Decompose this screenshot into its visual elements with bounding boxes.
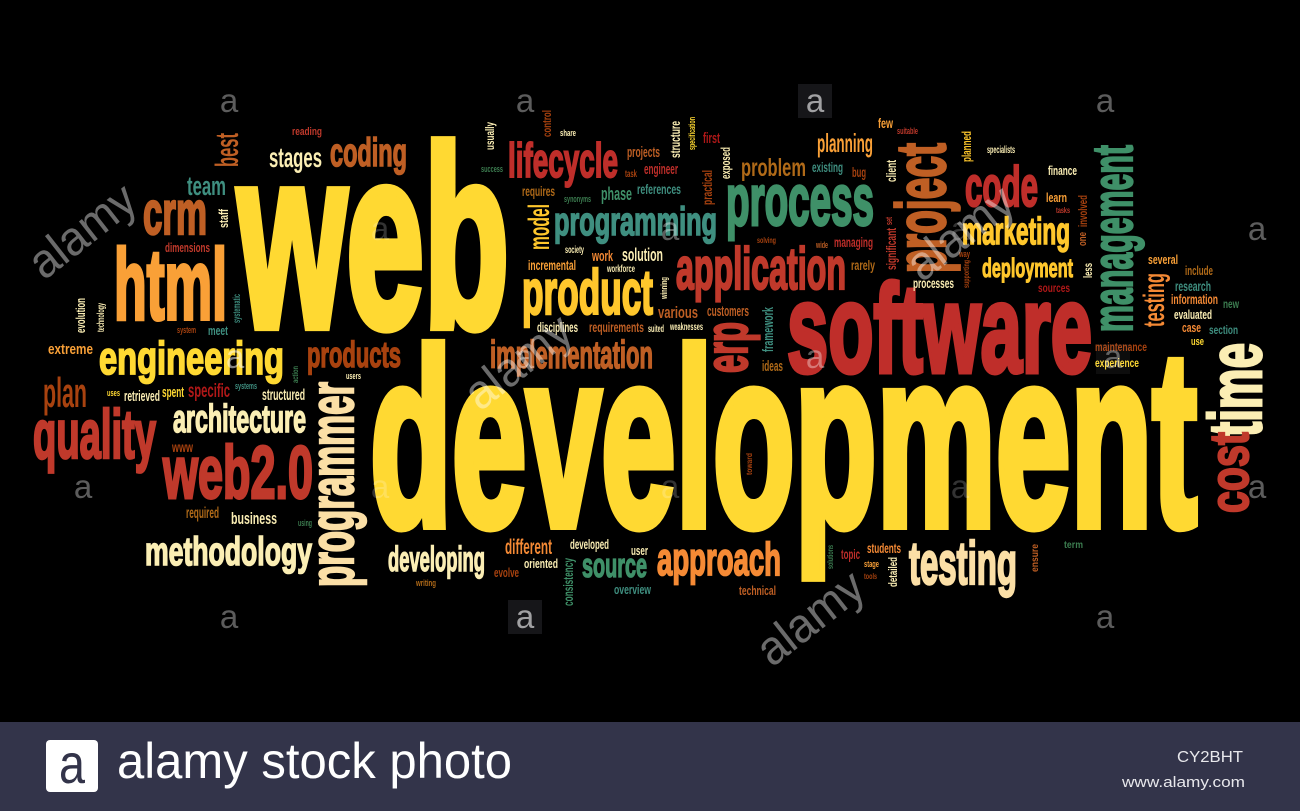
small words: bottom cluster: oriented bbox=[524, 556, 558, 571]
small words: bottom cluster: topic bbox=[841, 546, 860, 562]
small words: left cluster: technology bbox=[96, 303, 107, 332]
small words: centre cluster: incremental bbox=[528, 257, 576, 273]
watermark letter tiles bbox=[508, 84, 1130, 634]
small words: bottom cluster: term bbox=[1064, 540, 1083, 551]
footer brand text: alamy stock photo bbox=[117, 733, 512, 789]
small words: centre cluster: task bbox=[625, 169, 637, 180]
word: engineering: engineering bbox=[99, 332, 284, 384]
small words: left cluster: reading bbox=[292, 126, 322, 138]
small words: upper right cluster: new bbox=[1223, 297, 1239, 311]
small words: upper right cluster: problem bbox=[741, 154, 806, 182]
small words: left cluster: plan bbox=[43, 369, 87, 416]
watermark: alamy diagonals bbox=[18, 173, 1025, 677]
small words: upper right cluster: research bbox=[1175, 278, 1211, 294]
watermark letters a: a bbox=[516, 82, 535, 119]
small words: upper right cluster: learn bbox=[1046, 190, 1067, 205]
small words: upper right cluster: existing bbox=[812, 159, 843, 175]
word: source: source bbox=[582, 547, 647, 585]
small words: upper right cluster: significant bbox=[883, 228, 899, 270]
word: testing: testing bbox=[909, 530, 1017, 597]
word: html: html bbox=[114, 229, 227, 341]
small words: upper right cluster: way bbox=[958, 249, 970, 259]
watermark letters a: a bbox=[226, 338, 245, 375]
watermark letters a: a bbox=[661, 210, 680, 247]
word: quality: quality bbox=[33, 396, 156, 473]
small words: centre cluster: practical bbox=[699, 170, 715, 205]
image id: CY2BHT bbox=[1177, 749, 1243, 766]
small words: upper right cluster: bug bbox=[852, 164, 866, 180]
watermark overlay bbox=[18, 82, 1267, 677]
small words: centre cluster: work bbox=[591, 248, 613, 265]
small words: upper right cluster: information bbox=[1171, 291, 1218, 307]
small words: upper right cluster: evaluated bbox=[1174, 307, 1212, 322]
word: web2.0: web2.0 bbox=[162, 431, 313, 514]
word: approach: approach bbox=[657, 533, 781, 585]
small words: upper right cluster: rarely bbox=[851, 257, 875, 273]
word: programming: programming bbox=[554, 200, 717, 244]
small words: centre cluster: success bbox=[481, 164, 503, 174]
small words: centre cluster: specification bbox=[687, 117, 697, 150]
word: crm: crm bbox=[143, 179, 207, 247]
watermark: alamy diagonals: alamy bbox=[454, 304, 583, 421]
small words: upper right cluster: use bbox=[1191, 336, 1204, 348]
small words: left cluster: stages bbox=[269, 142, 322, 173]
small words: upper right cluster: involved bbox=[1076, 195, 1090, 227]
small words: bottom cluster: different bbox=[505, 536, 552, 559]
small words: centre cluster bbox=[481, 110, 783, 375]
small words: left cluster: uses bbox=[107, 388, 120, 398]
watermark letters a: a bbox=[516, 338, 535, 375]
small words: centre cluster: solution bbox=[622, 245, 663, 265]
word: process: process bbox=[726, 161, 874, 241]
small words: bottom cluster: toward bbox=[745, 453, 754, 475]
small words: centre cluster: various bbox=[658, 303, 698, 322]
small words: left cluster: staff bbox=[216, 209, 231, 228]
website: www.alamy.com bbox=[1121, 774, 1245, 791]
word: project: project bbox=[882, 143, 960, 273]
small words: upper right cluster: few bbox=[878, 115, 893, 131]
word: time: time bbox=[1194, 343, 1277, 437]
small words: left cluster: dimensions bbox=[165, 240, 210, 255]
small words: centre cluster: suited bbox=[648, 324, 664, 335]
small words: centre cluster: structure bbox=[667, 121, 683, 158]
small words: upper right cluster: specialists bbox=[987, 145, 1015, 156]
word: methodology: methodology bbox=[145, 530, 313, 574]
small words: bottom cluster: detailed bbox=[886, 557, 900, 587]
watermark letters a: a bbox=[1248, 210, 1267, 247]
small words: left cluster: system bbox=[177, 325, 196, 335]
small words: centre cluster: winning bbox=[659, 277, 669, 300]
small words: centre cluster: workforce bbox=[606, 264, 635, 275]
word: software: software bbox=[787, 260, 1092, 399]
watermark letters a bbox=[74, 82, 1267, 635]
small words: centre cluster: usually bbox=[483, 122, 497, 150]
small words: centre cluster: disciplines bbox=[537, 319, 578, 335]
small words: left cluster: www bbox=[171, 439, 193, 455]
small words: upper right cluster: include bbox=[1185, 263, 1213, 278]
watermark letters a: a bbox=[806, 338, 825, 375]
word: lifecycle: lifecycle bbox=[508, 135, 618, 188]
word: code: code bbox=[965, 155, 1038, 219]
small words: left cluster: team bbox=[187, 171, 226, 201]
small words: upper right cluster: supporting bbox=[962, 260, 971, 288]
small words: bottom cluster: writing bbox=[415, 578, 436, 588]
small words: bottom cluster bbox=[415, 453, 1083, 606]
watermark letters a: a bbox=[806, 82, 825, 119]
watermark: alamy diagonals: alamy bbox=[18, 173, 147, 290]
watermark letters a: a bbox=[1096, 598, 1115, 635]
small words: centre cluster: ideas bbox=[762, 358, 783, 375]
small words: centre cluster: control bbox=[540, 110, 554, 137]
watermark letters a: a bbox=[220, 82, 239, 119]
small words: left cluster: meet bbox=[208, 323, 228, 338]
watermark letters a: a bbox=[1096, 82, 1115, 119]
word: implementation: implementation bbox=[490, 334, 653, 377]
watermark letters a: a bbox=[371, 210, 390, 247]
small words: centre cluster: society bbox=[565, 245, 584, 256]
small words: bottom cluster: technical bbox=[739, 583, 776, 598]
small words: left cluster: systematic bbox=[232, 294, 243, 323]
word: application: application bbox=[676, 236, 846, 302]
icon: alamy logo: a bbox=[59, 732, 86, 795]
word: coding: coding bbox=[330, 131, 407, 175]
word: web: web bbox=[237, 96, 509, 381]
icon: alamy logo bbox=[46, 732, 98, 795]
watermark letters a: a bbox=[1104, 338, 1123, 375]
small words: left cluster: retrieved bbox=[124, 388, 160, 405]
small words: left cluster: action bbox=[291, 366, 300, 383]
small words: upper right cluster bbox=[741, 115, 1239, 370]
small words: left cluster: structured bbox=[262, 387, 305, 404]
small words: left cluster: systems bbox=[235, 381, 257, 391]
word: testing (vertical): testing bbox=[1138, 273, 1171, 327]
small words: bottom cluster: students bbox=[867, 540, 901, 556]
word: architecture: architecture bbox=[173, 398, 306, 441]
word: marketing: marketing bbox=[962, 211, 1070, 253]
small words: centre cluster: phase bbox=[601, 184, 632, 204]
small words: upper right cluster: client bbox=[883, 160, 899, 182]
small words: centre cluster: framework bbox=[760, 307, 777, 352]
small words: upper right cluster: sources bbox=[1038, 281, 1070, 295]
small words: bottom cluster: overview bbox=[614, 582, 652, 597]
small words: upper right cluster: set bbox=[884, 217, 894, 225]
small words: centre cluster: share bbox=[560, 128, 576, 138]
small words: upper right cluster: less bbox=[1081, 263, 1095, 278]
watermark letters a: a bbox=[661, 468, 680, 505]
small words: centre cluster: engineer bbox=[644, 161, 678, 178]
small words: centre cluster: weaknesses bbox=[669, 322, 703, 333]
small words: upper right cluster: wide bbox=[815, 240, 828, 250]
word: deployment: deployment bbox=[982, 253, 1073, 283]
small words: centre cluster: requires bbox=[522, 183, 555, 199]
small words: left cluster: users bbox=[346, 371, 361, 381]
small words: left cluster: spent bbox=[162, 384, 184, 401]
small words: upper right cluster: one bbox=[1077, 232, 1089, 246]
small words: bottom cluster: stage bbox=[864, 559, 879, 569]
small words: upper right cluster: case bbox=[1182, 320, 1201, 335]
small words: left cluster: using bbox=[298, 518, 312, 528]
small words: bottom cluster: user bbox=[631, 543, 648, 558]
small words: upper right cluster: tasks bbox=[1056, 206, 1070, 215]
small words: upper right cluster: section bbox=[1209, 323, 1238, 337]
small words: upper right cluster: maintenance bbox=[1095, 340, 1147, 354]
watermark letters a: a bbox=[220, 598, 239, 635]
small words: upper right cluster: solving bbox=[757, 236, 776, 245]
word: products: products bbox=[307, 334, 401, 375]
watermark: alamy diagonals: alamy bbox=[746, 560, 875, 677]
small words: upper right cluster: several bbox=[1148, 252, 1178, 267]
small words: left cluster: required bbox=[186, 505, 219, 522]
small words: left cluster: business bbox=[231, 509, 277, 528]
word: erp: erp bbox=[693, 322, 760, 373]
small words: left cluster: best bbox=[209, 133, 245, 167]
small words: upper right cluster: suitable bbox=[897, 126, 918, 136]
watermark letters a: a bbox=[951, 468, 970, 505]
small words: bottom cluster: ensure bbox=[1030, 544, 1041, 572]
small words: left cluster: extreme bbox=[48, 341, 93, 358]
footer band bbox=[0, 722, 1300, 811]
small words: upper right cluster: planning bbox=[817, 128, 873, 158]
watermark letters a: a bbox=[74, 468, 93, 505]
word: programmer: programmer bbox=[298, 382, 367, 587]
small words: bottom cluster: solutions bbox=[826, 545, 835, 569]
small words: centre cluster: exposed bbox=[718, 147, 733, 179]
small words: left cluster: specific bbox=[188, 381, 230, 402]
small words: centre cluster: model bbox=[523, 204, 556, 250]
small words: centre cluster: first bbox=[703, 130, 720, 147]
word cloud bbox=[33, 96, 1277, 606]
small words: upper right cluster: experience bbox=[1095, 356, 1139, 370]
small words: centre cluster: projects bbox=[627, 144, 660, 161]
small words: left cluster bbox=[43, 126, 361, 528]
small words: centre cluster: customers bbox=[707, 303, 749, 320]
small words: upper right cluster: managing bbox=[834, 234, 873, 250]
small words: bottom cluster: consistency bbox=[560, 558, 576, 606]
small words: upper right cluster: processes bbox=[913, 275, 954, 291]
small words: bottom cluster: tools bbox=[864, 572, 877, 581]
small words: bottom cluster: evolve bbox=[494, 565, 519, 580]
small words: left cluster: evolution bbox=[73, 298, 88, 333]
watermark: alamy diagonals: alamy bbox=[896, 175, 1025, 292]
watermark letters a: a bbox=[371, 468, 390, 505]
watermark letters a: a bbox=[951, 210, 970, 247]
small words: upper right cluster: finance bbox=[1048, 163, 1077, 178]
watermark letters a: a bbox=[1248, 468, 1267, 505]
small words: centre cluster: synonyms bbox=[564, 194, 591, 204]
small words: centre cluster: requirements bbox=[589, 319, 644, 335]
watermark letters a: a bbox=[516, 598, 535, 635]
small words: centre cluster: references bbox=[637, 181, 681, 197]
word: developing: developing bbox=[388, 540, 485, 579]
small words: upper right cluster: planned bbox=[959, 131, 974, 162]
small words: bottom cluster: developed bbox=[570, 536, 609, 552]
word: cost: cost bbox=[1198, 432, 1260, 513]
word: product: product bbox=[522, 258, 653, 328]
